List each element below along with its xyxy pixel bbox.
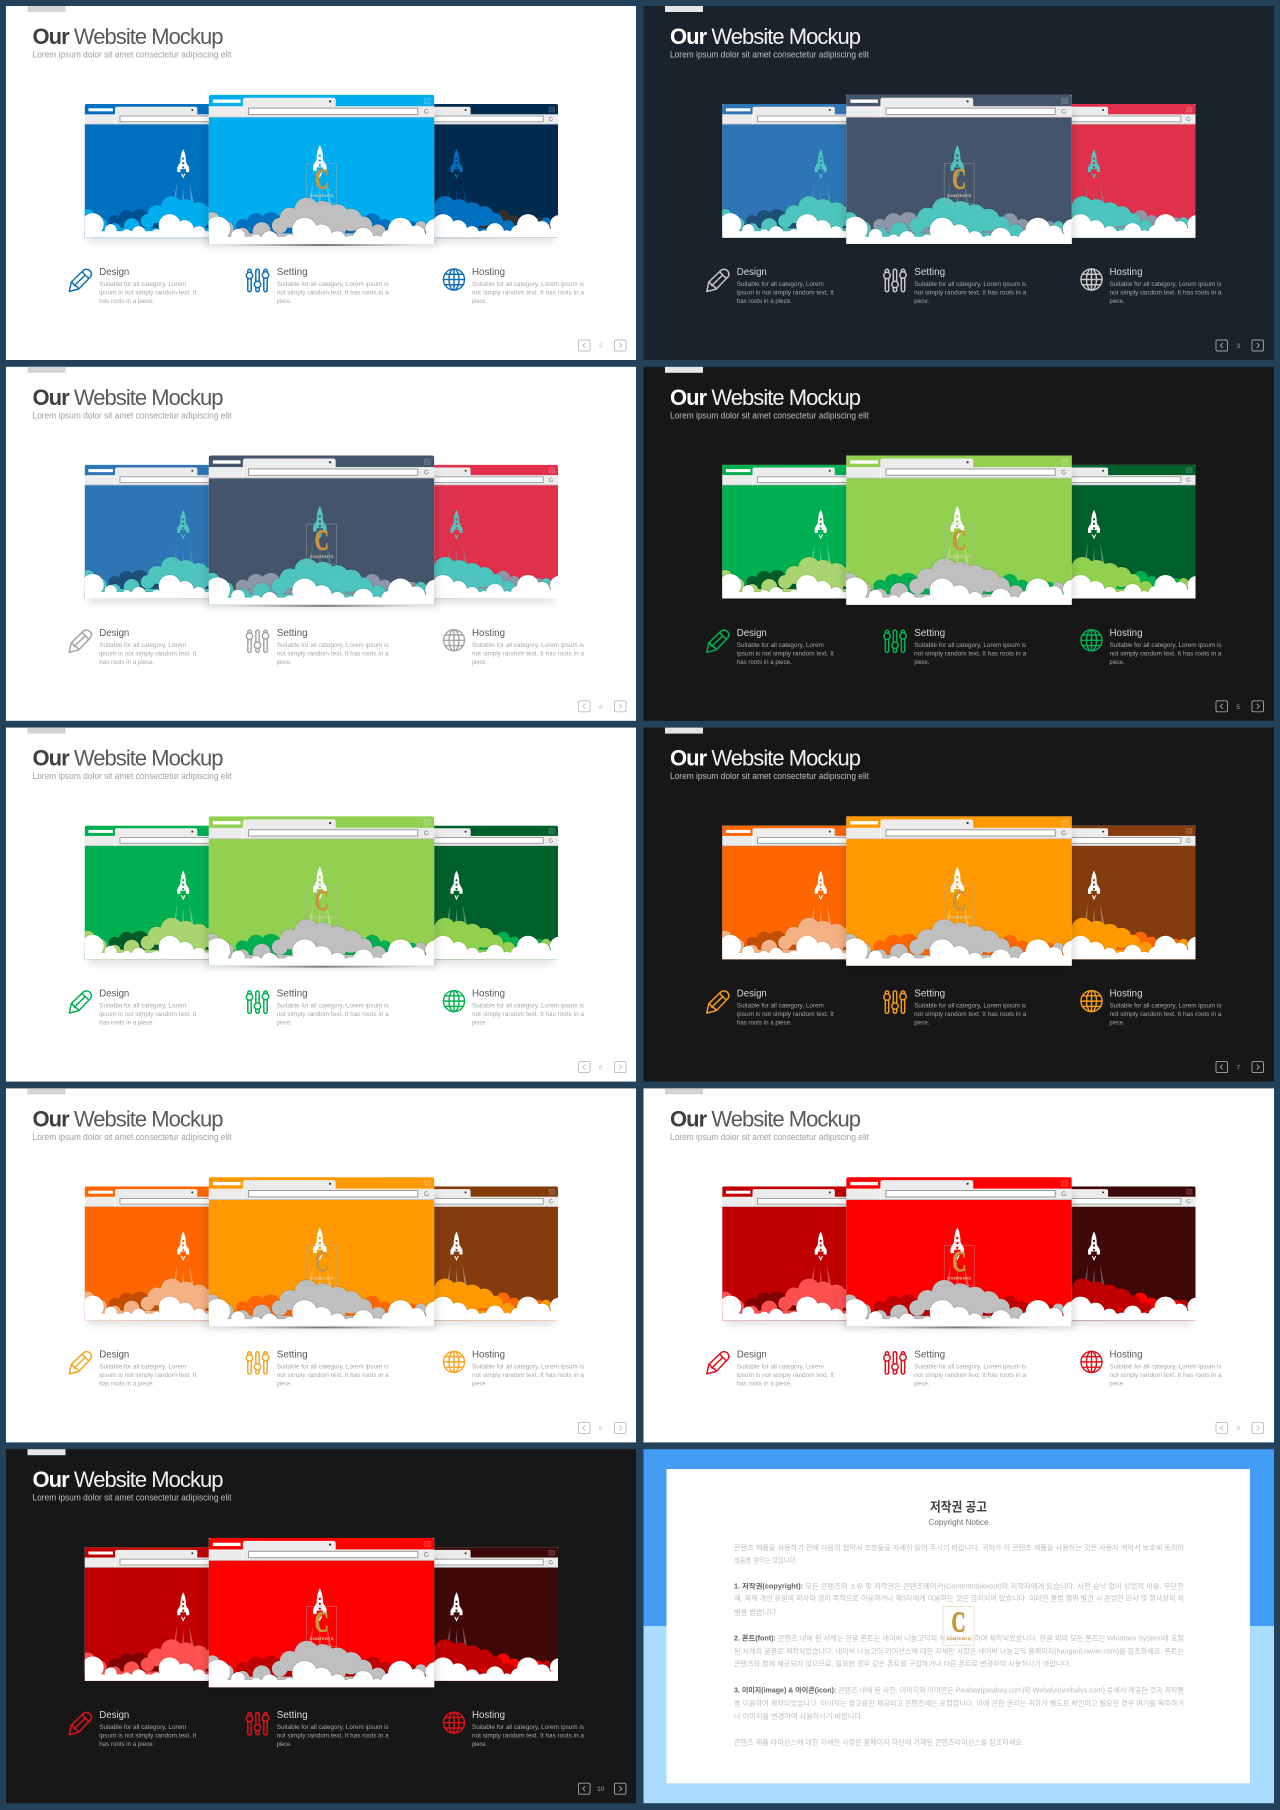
feature: hosting: Hosting [472, 1709, 505, 1721]
browser mockups: C [315, 524, 329, 556]
notice body text: 셨음을 알리는 것입니다. [734, 1555, 797, 1564]
feature: design: has roots in a piece. [99, 1020, 155, 1027]
heading: copyright notice, Korean: 저작권 공고 [930, 1500, 987, 1515]
feature: design [707, 627, 834, 666]
feature: design: Suitable for all category, Lorem [737, 642, 824, 649]
feature: hosting: piece. [1110, 1020, 1125, 1027]
feature: hosting: piece. [1110, 1380, 1125, 1387]
panel: orange mockup on black, page 7 [644, 728, 1274, 1082]
feature: hosting: Suitable for all category, Lorem ipsum is [472, 1003, 584, 1010]
browser mockups: C [315, 164, 329, 196]
watermark logo: C [952, 1606, 966, 1638]
feature: setting: Setting [914, 1348, 945, 1360]
title: Our Website Mockup [670, 746, 861, 771]
feature: setting: Suitable for all category, Lorem ipsum is [914, 642, 1026, 649]
feature: hosting: Hosting [472, 1348, 505, 1360]
subtitle: Lorem ipsum dolor sit amet consectetur adipiscing elit [670, 771, 869, 782]
feature: hosting: not simply random text. It has roots in a [1110, 1011, 1222, 1018]
feature: design: has roots in a piece. [99, 298, 155, 305]
panel: orange mockup on white, page 8 [6, 1088, 636, 1442]
feature: hosting: Suitable for all category, Lorem ipsum is [1110, 1363, 1222, 1370]
feature: design: ipsum is not simply random text. It [99, 1733, 197, 1740]
panel: blue mockup on white, page 2 [6, 6, 636, 360]
browser mockups [81, 1538, 568, 1692]
feature: setting: piece. [277, 298, 292, 305]
browser mockups [81, 456, 568, 610]
feature: design [69, 627, 197, 666]
feature: setting: not simply random text. It has roots in a [277, 1733, 389, 1740]
feature: hosting: Suitable for all category, Lorem ipsum is [472, 1724, 584, 1731]
feature: setting [884, 266, 1027, 305]
notice body text: 벌을 받습니다. [734, 1607, 778, 1616]
feature: hosting: Hosting [1110, 266, 1143, 278]
title: Our Website Mockup [32, 746, 224, 771]
feature: design: Design [737, 1348, 767, 1360]
feature: setting: Suitable for all category, Lorem ipsum is [277, 1363, 389, 1370]
feature: setting: not simply random text. It has roots in a [277, 290, 389, 296]
feature: setting [884, 988, 1027, 1027]
feature: hosting: not simply random text. It has roots in a [472, 650, 584, 657]
feature: design: Design [99, 627, 129, 639]
feature: hosting: piece. [472, 659, 487, 666]
feature: design: Suitable for all category, Lorem [99, 281, 186, 288]
feature: hosting: piece. [1110, 659, 1125, 666]
feature: design: has roots in a piece. [99, 1380, 155, 1387]
feature: setting: not simply random text. It has roots in a [277, 1011, 389, 1018]
feature: setting [884, 627, 1027, 666]
browser mockups: C [952, 524, 966, 556]
feature: hosting [1081, 1348, 1222, 1387]
title: Our Website Mockup [670, 385, 861, 410]
feature: hosting: piece. [1110, 298, 1125, 305]
subtitle: Lorem ipsum dolor sit amet consectetur adipiscing elit [32, 1132, 232, 1143]
feature: setting [884, 1348, 1027, 1387]
feature: hosting: Hosting [1110, 988, 1143, 1000]
feature: hosting [1081, 988, 1222, 1027]
feature: design: ipsum is not simply random text. It [99, 1372, 197, 1379]
notice body text [734, 1543, 1185, 1746]
feature: hosting: not simply random text. It has roots in a [472, 1372, 584, 1379]
feature: setting: Suitable for all category, Lorem ipsum is [277, 1003, 389, 1010]
feature: design: Design [737, 988, 767, 1000]
panel: green mockup on black, page 5 [644, 367, 1274, 721]
pager: 7 [1236, 1065, 1240, 1072]
feature: hosting [443, 627, 584, 666]
feature: setting: Suitable for all category, Lorem ipsum is [914, 1363, 1026, 1370]
feature: design: Design [737, 627, 767, 639]
title: Our Website Mockup [32, 1467, 224, 1492]
feature: design: ipsum is not simply random text. It [737, 290, 834, 296]
feature: design: Suitable for all category, Lorem [99, 1724, 186, 1731]
watermark logo: CONTENTS [946, 1636, 971, 1641]
feature: design [69, 266, 197, 305]
feature: hosting: not simply random text. It has roots in a [1110, 290, 1222, 296]
browser mockups: C [952, 1246, 966, 1278]
feature: design [707, 988, 834, 1027]
feature: design: Suitable for all category, Lorem [99, 1363, 186, 1370]
feature: design: has roots in a piece. [737, 1380, 792, 1387]
feature: design: ipsum is not simply random text. It [99, 650, 197, 657]
feature: setting: piece. [914, 659, 929, 666]
subtitle: Lorem ipsum dolor sit amet consectetur adipiscing elit [32, 1493, 232, 1504]
subtitle: Lorem ipsum dolor sit amet consectetur adipiscing elit [670, 50, 869, 60]
feature: setting: piece. [914, 1020, 929, 1027]
feature: design: Design [99, 1709, 129, 1721]
browser mockups [81, 95, 568, 249]
browser mockups [718, 816, 1206, 971]
feature: setting: piece. [914, 1380, 929, 1387]
panel: red mockup on black, page 10 [6, 1449, 636, 1803]
browser mockups [81, 816, 568, 971]
feature: hosting: Suitable for all category, Lorem ipsum is [1110, 281, 1222, 288]
watermark logo [943, 1606, 974, 1645]
title: Our Website Mockup [32, 24, 224, 49]
feature: design [707, 1348, 834, 1387]
feature: hosting [443, 988, 584, 1027]
pager: 3 [1236, 343, 1240, 350]
pager: 6 [599, 1065, 603, 1072]
feature: hosting: not simply random text. It has roots in a [472, 290, 584, 296]
feature: setting: Setting [277, 1709, 308, 1721]
feature: setting: Setting [914, 988, 945, 1000]
pager: 4 [599, 704, 603, 711]
feature: setting: not simply random text. It has roots in a [277, 650, 389, 657]
pager [1216, 1062, 1264, 1073]
browser mockups: C [315, 1607, 329, 1639]
feature: setting: piece. [277, 659, 292, 666]
feature: setting: piece. [277, 1741, 292, 1748]
subtitle: Lorem ipsum dolor sit amet consectetur adipiscing elit [32, 771, 232, 782]
feature: hosting: not simply random text. It has roots in a [1110, 1372, 1222, 1379]
pager [578, 340, 626, 351]
feature: design: Suitable for all category, Lorem [99, 1003, 186, 1010]
feature: setting: Setting [277, 266, 308, 278]
feature: hosting: piece. [472, 1741, 487, 1748]
browser mockups: C [952, 164, 966, 196]
feature: design: Design [99, 266, 129, 278]
title: Our Website Mockup [32, 385, 224, 410]
subtitle: Lorem ipsum dolor sit amet consectetur adipiscing elit [670, 410, 869, 421]
browser mockups: CONTENTS [947, 915, 972, 920]
feature: design: has roots in a piece. [737, 659, 792, 666]
heading: copyright notice, English: Copyright Notice [928, 1517, 989, 1527]
pager: 2 [599, 343, 603, 350]
pager: 10 [597, 1786, 605, 1793]
browser mockups: C [315, 885, 329, 917]
subtitle: Lorem ipsum dolor sit amet consectetur adipiscing elit [32, 410, 232, 421]
pager: 8 [599, 1425, 603, 1432]
browser mockups: CONTENTS [310, 1275, 334, 1280]
feature: hosting: Suitable for all category, Lorem ipsum is [472, 642, 584, 649]
feature: hosting: piece. [472, 298, 487, 305]
feature: design: Suitable for all category, Lorem [737, 1003, 824, 1010]
feature: design: has roots in a piece. [99, 659, 155, 666]
feature: hosting: Hosting [1110, 1348, 1143, 1360]
feature: setting [246, 988, 389, 1027]
feature: hosting: piece. [472, 1380, 487, 1387]
feature: hosting: not simply random text. It has roots in a [1110, 650, 1222, 657]
feature: hosting: Suitable for all category, Lorem ipsum is [1110, 1003, 1222, 1010]
feature: setting: Suitable for all category, Lorem ipsum is [277, 281, 389, 288]
browser mockups: C [952, 885, 966, 917]
feature: setting: Setting [914, 627, 945, 639]
feature: setting: not simply random text. It has roots in a [914, 1011, 1027, 1018]
feature: setting: Setting [914, 266, 945, 278]
browser mockups: C [315, 1246, 329, 1278]
feature: design: Suitable for all category, Lorem [737, 281, 824, 288]
browser mockups: CONTENTS [947, 193, 972, 198]
notice body text: 1. 저작권(copyright): 모든 콘텐츠의 소유 및 저작권은 콘텐츠메이커(Contentstokeout)와 저작자에게 있습니다. 사전 승낙 없이 상업적 이용, 무단전 [734, 1581, 1184, 1590]
browser mockups: CONTENTS [310, 1636, 334, 1641]
browser mockups [718, 95, 1206, 249]
feature: setting [246, 266, 389, 305]
title: Our Website Mockup [670, 1106, 861, 1131]
title: Our Website Mockup [32, 1106, 224, 1131]
feature: design [69, 1709, 197, 1748]
title: Our Website Mockup [670, 24, 861, 49]
notice body text: 을 이용하여 제작되었습니다. 이미지는 참고용만 제공되고 콘텐츠에는 포함합니다. 이에 관한 권리는 귀하가 별도로 확인하고 필요한 경우 여기를 획득하거 [734, 1698, 1184, 1707]
feature: setting: piece. [914, 298, 929, 305]
feature: setting: Setting [277, 988, 308, 1000]
subtitle: Lorem ipsum dolor sit amet consectetur adipiscing elit [32, 50, 232, 60]
notice body text: 재, 복제 개인 유일의 회사의 영리 목적으로 이용하거나 제3자에게 이용하는 것은 금지되어 있습니다. 이러한 불법 행위 발견 시 준엄한 민사 및 형사상의 처 [734, 1594, 1184, 1603]
browser mockups [718, 1177, 1206, 1331]
pager [578, 1783, 626, 1794]
feature: hosting: not simply random text. It has roots in a [472, 1733, 584, 1740]
notice body text: 콘텐츠 제품 라이선스에 대한 자세한 사항은 홈페이지 하단에 기재된 콘텐츠라이선스를 참조하세요. [734, 1737, 1024, 1746]
feature: setting: not simply random text. It has roots in a [914, 650, 1027, 657]
feature: hosting: Suitable for all category, Lorem ipsum is [472, 1363, 584, 1370]
notice body text: 된 서체의 글꼴로 제작되었습니다. 네이버 나눔고딕 라이선스에 대한 자세한 사항은 네이버 나눔고딕 홈페이지(hangeul.naver.com)를 참조하세요. 폰트는 [734, 1646, 1185, 1655]
notice body text: 나 이미지를 변경하여 사용하시기 바랍니다. [734, 1711, 863, 1720]
feature: hosting [1081, 266, 1222, 305]
feature: design: has roots in a piece. [737, 298, 792, 305]
feature: design: ipsum is not simply random text. It [737, 650, 834, 657]
feature: setting [246, 1709, 389, 1748]
feature: setting: Suitable for all category, Lorem ipsum is [914, 281, 1026, 288]
feature: setting: Suitable for all category, Lorem ipsum is [277, 1724, 389, 1731]
feature: design: Design [99, 988, 129, 1000]
browser mockups: CONTENTS [310, 915, 334, 920]
feature: setting: Suitable for all category, Lorem ipsum is [277, 642, 389, 649]
feature: design: ipsum is not simply random text. It [737, 1011, 834, 1018]
feature: hosting: Suitable for all category, Lorem ipsum is [472, 281, 584, 288]
pager [578, 1422, 626, 1433]
pager [578, 1062, 626, 1073]
subtitle: Lorem ipsum dolor sit amet consectetur adipiscing elit [670, 1132, 869, 1143]
feature: design: has roots in a piece. [99, 1741, 155, 1748]
feature: setting: not simply random text. It has roots in a [914, 290, 1027, 296]
feature: design: Design [99, 1348, 129, 1360]
feature: design: Suitable for all category, Lorem [737, 1363, 824, 1370]
feature: hosting: Hosting [1110, 627, 1143, 639]
feature: hosting: piece. [472, 1020, 487, 1027]
pager [1216, 701, 1264, 712]
feature: setting: not simply random text. It has roots in a [914, 1372, 1027, 1379]
feature: hosting: not simply random text. It has roots in a [472, 1011, 584, 1018]
notice body text: 콘텐츠와 함께 제공되지 않으므로, 필요한 경우 같은 폰트를 구입하거나 다른 폰트로 변경하여 사용하시기 바랍니다. [734, 1659, 1071, 1668]
feature: hosting: Hosting [472, 627, 505, 639]
feature: setting [246, 1348, 389, 1387]
feature: hosting: Hosting [472, 988, 505, 1000]
feature: hosting [443, 266, 584, 305]
pager [1216, 340, 1264, 351]
pager [578, 701, 626, 712]
feature: hosting: Hosting [472, 266, 505, 278]
browser mockups [81, 1177, 568, 1331]
feature: design: ipsum is not simply random text. It [99, 1011, 197, 1018]
feature: design: ipsum is not simply random text. It [99, 290, 197, 296]
panel: slate and crimson mockup on white, page 4 [6, 367, 636, 721]
feature: design [69, 988, 197, 1027]
feature: hosting [1081, 627, 1222, 666]
feature: hosting: Suitable for all category, Lorem ipsum is [1110, 642, 1222, 649]
browser mockups: CONTENTS [947, 554, 972, 559]
feature: design [707, 266, 834, 305]
feature: setting: piece. [277, 1020, 292, 1027]
feature: setting: Suitable for all category, Lorem ipsum is [914, 1003, 1026, 1010]
feature: hosting [443, 1348, 584, 1387]
browser mockups: CONTENTS [947, 1275, 972, 1280]
browser mockups: CONTENTS [310, 193, 334, 198]
notice body text: 콘텐츠 제품을 사용하기 전에 다음의 협약서 조항들을 자세히 읽어 주시기 바랍니다. 귀하가 이 콘텐츠 제품을 사용하는 것은 사용자 계약서 보호에 동의하 [734, 1543, 1185, 1552]
feature: setting: piece. [277, 1380, 292, 1387]
feature: design [69, 1348, 197, 1387]
feature: design: ipsum is not simply random text. It [737, 1372, 834, 1379]
feature: design: Suitable for all category, Lorem [99, 642, 186, 649]
pager: 5 [1236, 704, 1240, 711]
feature: design: has roots in a piece. [737, 1020, 792, 1027]
panel: green mockup on white, page 6 [6, 728, 636, 1082]
panel: copyright notice [644, 1449, 1274, 1803]
panel: slate and crimson mockup on navy, page 3 [644, 6, 1274, 360]
browser mockups [718, 456, 1206, 610]
feature: setting [246, 627, 389, 666]
browser mockups: CONTENTS [310, 554, 334, 559]
notice body text: 3. 이미지(image) & 아이콘(icon): 콘텐츠 내에 된 사진, 이미지와 아이콘은 Pixabay(pixabay.com)와 Webalys(webalys.com) 등에서 제공한 것과 저작물 [734, 1685, 1185, 1694]
feature: setting: not simply random text. It has roots in a [277, 1372, 389, 1379]
pager: 9 [1236, 1425, 1240, 1432]
panel: red mockup on white, page 9 [644, 1088, 1274, 1442]
feature: design: Design [737, 266, 767, 278]
notice body text: 2. 폰트(font): 콘텐츠 내에 된 서체는 한글 폰트는 네이버 나눔고딕의 서체를 사용하여 제작되었습니다. 한글 외의 모든 폰트는 Windows System에 포함 [734, 1634, 1185, 1643]
feature: setting: Setting [277, 627, 308, 639]
feature: hosting [443, 1709, 584, 1748]
pager [1216, 1422, 1264, 1433]
feature: setting: Setting [277, 1348, 308, 1360]
